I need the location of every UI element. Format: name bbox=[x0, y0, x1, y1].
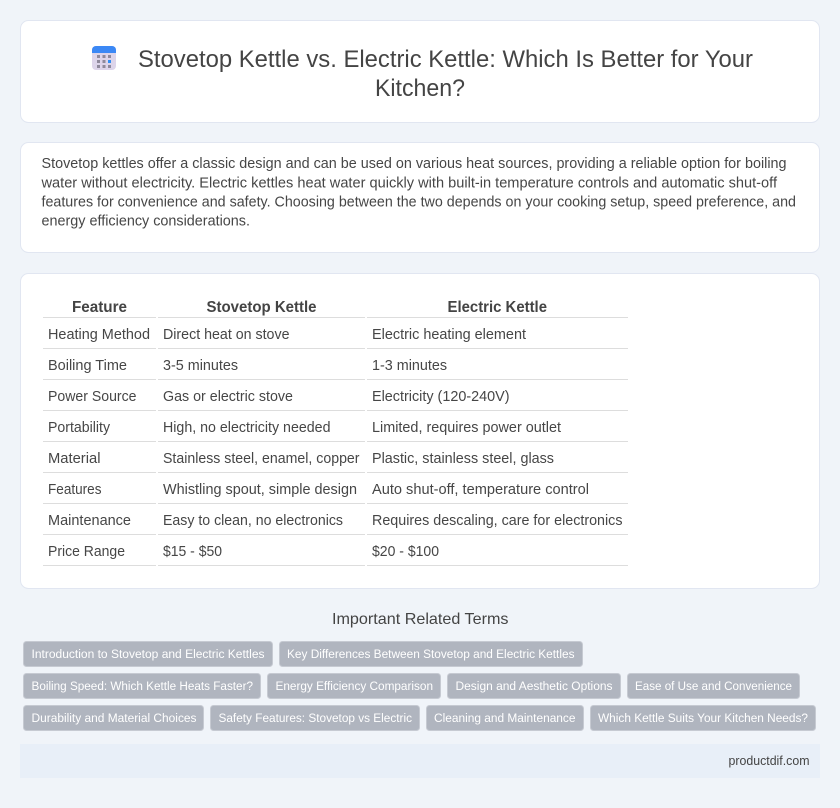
row: power source: Gas or electric stove bbox=[163, 389, 293, 405]
related term tags: Ease of Use and Convenience bbox=[635, 679, 792, 693]
related term tags: Safety Features: Stovetop vs Electric bbox=[218, 711, 412, 725]
related term tags: Durability and Material Choices bbox=[32, 711, 196, 725]
intro text panel: water without electricity. Electric kettles heat water quickly with built-in temperature controls and automatic shut-off bbox=[41, 175, 778, 191]
table header: Stovetop Kettle bbox=[206, 299, 317, 316]
related term tags: Boiling Speed: Which Kettle Heats Faster? bbox=[32, 679, 253, 693]
row: heating method: Electric heating element bbox=[372, 327, 526, 343]
row: portability: High, no electricity needed bbox=[163, 420, 330, 436]
row: material: Stainless steel, enamel, copper bbox=[163, 451, 360, 467]
row: material: Plastic, stainless steel, glass bbox=[372, 451, 554, 467]
icon: calendar grid bbox=[92, 46, 116, 70]
row: boiling time: 1-3 minutes bbox=[372, 358, 447, 374]
related term tags: Introduction to Stovetop and Electric Kettles bbox=[32, 647, 264, 661]
row: maintenance: Requires descaling, care for electronics bbox=[372, 513, 622, 529]
intro text panel: Stovetop kettles offer a classic design and can be used on various heat sources, providing a reliable option for boiling bbox=[42, 156, 786, 172]
row: boiling time: 3-5 minutes bbox=[163, 358, 238, 374]
related term tags: Cleaning and Maintenance bbox=[434, 711, 576, 725]
table header: Electric Kettle bbox=[448, 299, 547, 316]
row: features bbox=[48, 482, 589, 498]
row: maintenance bbox=[48, 513, 622, 529]
row: material bbox=[48, 451, 554, 467]
row: features: Whistling spout, simple design bbox=[163, 482, 357, 498]
row: maintenance: Maintenance bbox=[48, 513, 131, 529]
row: price range: $20 - $100 bbox=[372, 544, 439, 560]
row: power source: Power Source bbox=[48, 389, 136, 405]
row: portability: Limited, requires power outlet bbox=[372, 420, 561, 436]
row: boiling time: Boiling Time bbox=[48, 358, 127, 374]
row: power source: Electricity (120-240V) bbox=[372, 389, 510, 405]
intro text panel: features for convenience and safety. Choosing between the two depends on your cooking setup, speed preference, and bbox=[42, 194, 796, 210]
related term tags: Key Differences Between Stovetop and Electric Kettles bbox=[287, 647, 574, 661]
row: portability bbox=[48, 420, 561, 436]
heading: important related terms: Important Related Terms bbox=[332, 611, 508, 628]
row: portability: Portability bbox=[48, 420, 111, 436]
comparison table panel bbox=[20, 274, 820, 588]
table header: Feature bbox=[72, 299, 127, 316]
title bbox=[138, 46, 753, 102]
row: price range: $15 - $50 bbox=[163, 544, 222, 560]
row: heating method: Heating Method bbox=[48, 327, 150, 343]
row: heating method bbox=[48, 327, 526, 343]
row: maintenance: Easy to clean, no electronics bbox=[163, 513, 343, 529]
related term tags: Design and Aesthetic Options bbox=[456, 679, 612, 693]
header panel bbox=[20, 20, 820, 122]
row: boiling time bbox=[48, 358, 447, 374]
related term tags bbox=[24, 642, 816, 730]
footer bar bbox=[20, 744, 820, 778]
row: features: Features bbox=[48, 482, 102, 498]
row: price range: Price Range bbox=[48, 544, 125, 560]
intro text panel bbox=[20, 142, 820, 252]
title: Kitchen? bbox=[375, 75, 465, 102]
row: power source bbox=[48, 389, 510, 405]
row: features: Auto shut-off, temperature control bbox=[372, 482, 589, 498]
row: price range bbox=[48, 544, 439, 560]
related term tags: Energy Efficiency Comparison bbox=[276, 679, 433, 693]
row: heating method: Direct heat on stove bbox=[163, 327, 290, 343]
footer bar: productdif.com bbox=[728, 754, 810, 768]
row: material: Material bbox=[48, 451, 100, 467]
intro text panel: energy efficiency considerations. bbox=[42, 214, 250, 230]
title: Stovetop Kettle vs. Electric Kettle: Which Is Better for Your bbox=[138, 46, 753, 73]
related term tags: Which Kettle Suits Your Kitchen Needs? bbox=[598, 711, 808, 725]
table header bbox=[72, 299, 547, 316]
